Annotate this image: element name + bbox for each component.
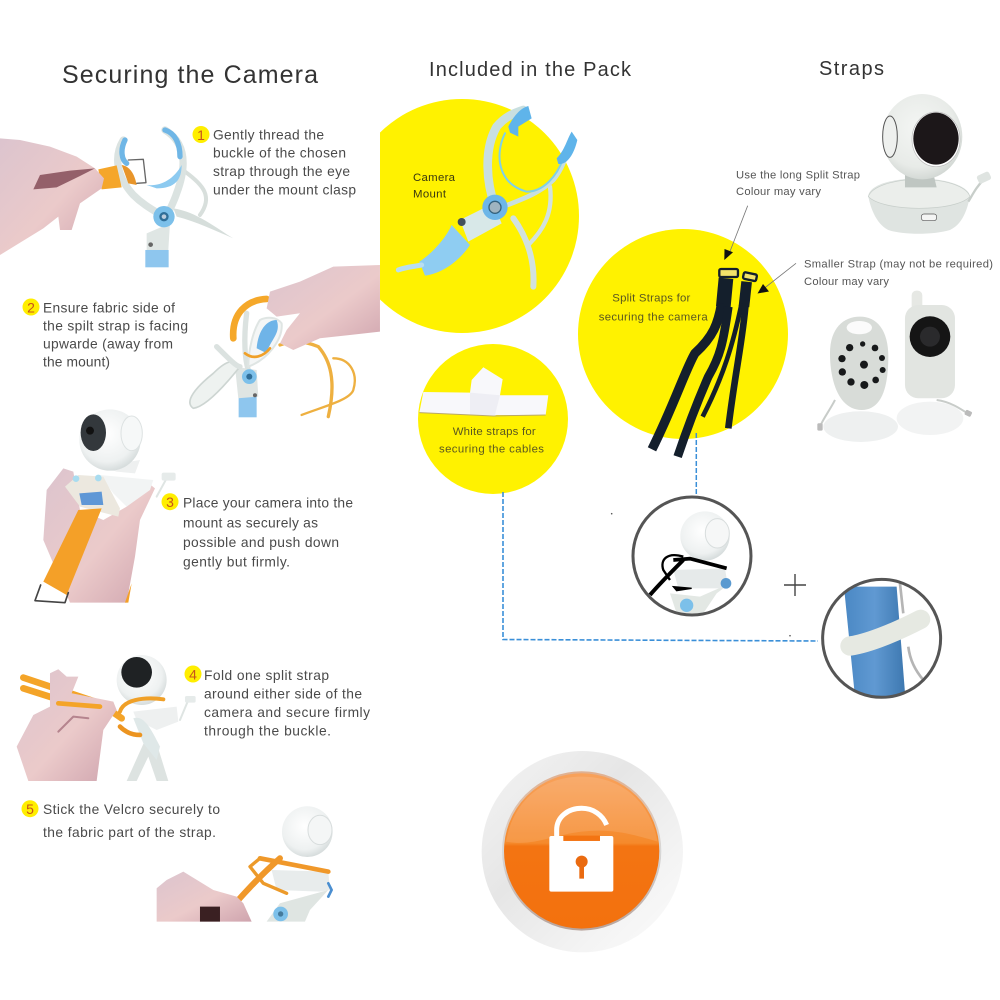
instruction text 3: possible and push down — [183, 535, 339, 550]
label: Camera Mount: Mount — [413, 188, 447, 200]
instruction text 2: the mount) — [43, 355, 110, 370]
badge 2 — [22, 298, 40, 316]
badge 3: 3 — [166, 494, 174, 510]
instruction text 2: upwarde (away from — [43, 336, 173, 351]
instruction text 1 — [213, 127, 356, 197]
padlock — [549, 808, 613, 892]
instruction text 1: buckle of the chosen — [213, 146, 346, 161]
instruction text 4: through the buckle. — [204, 723, 331, 738]
instruction text 3: gently but firmly. — [183, 555, 290, 570]
instruction text 1: strap through the eye — [213, 164, 350, 179]
instruction text 4: camera and secure firmly — [204, 705, 370, 720]
badge 4: 4 — [189, 666, 197, 682]
label: White straps for securing the cables: White straps for — [453, 426, 536, 438]
panel: white straps — [418, 344, 568, 494]
step 2 panel — [22, 265, 380, 417]
button halo — [482, 751, 683, 952]
callout: Smaller Strap — [804, 258, 993, 288]
photo: pan-tilt baby camera — [868, 94, 992, 234]
instruction text 3: mount as securely as — [183, 515, 318, 530]
heading: Straps: Straps — [819, 58, 884, 80]
callout: Smaller Strap: Colour may vary — [804, 276, 889, 288]
icon: camera mount — [398, 106, 577, 287]
label: Split Straps for securing the camera: securing the camera — [599, 312, 708, 324]
photo: hand threading strap through mount — [0, 130, 233, 267]
photo: baby monitor and camera unit — [817, 291, 972, 442]
instruction text 3 — [183, 496, 353, 570]
callout: Use the long Split Strap: Colour may vary — [736, 186, 821, 198]
photo: hand placing camera into mount — [35, 409, 176, 603]
icon: orange unlocked padlock button — [482, 751, 683, 952]
instruction text 1: under the mount clasp — [213, 182, 356, 197]
label: Split Straps for securing the camera — [599, 293, 708, 324]
callout: Use the long Split Strap — [736, 169, 860, 198]
instruction text 2: Ensure fabric side of — [43, 300, 175, 315]
decorative specks — [611, 513, 791, 636]
heading: Included in the Pack: Included in the Pack — [429, 59, 632, 81]
plus sign — [784, 574, 806, 596]
step 3 panel — [35, 409, 353, 603]
instruction text 2: the spilt strap is facing — [43, 319, 188, 334]
label: White straps for securing the cables: securing the cables — [439, 443, 544, 455]
yellow circle, split straps — [578, 229, 788, 439]
badge 2: 2 — [27, 300, 35, 316]
step 1 panel — [0, 126, 356, 267]
detail circle: white strap around stand — [823, 579, 941, 697]
photo: hand folding split strap around camera — [17, 655, 196, 781]
label: White straps for securing the cables — [439, 426, 544, 455]
label: Split Straps for securing the camera: Split Straps for — [612, 293, 691, 305]
instruction text 3: Place your camera into the — [183, 496, 353, 511]
badge 3 — [162, 493, 178, 510]
arrow to smaller strap — [758, 263, 796, 294]
step 5 panel — [22, 800, 333, 922]
instruction text 5 — [43, 802, 220, 840]
badge 5: 5 — [26, 801, 34, 817]
photo: hand holding strap on mount — [190, 265, 380, 417]
icon: white velcro strap — [419, 367, 548, 416]
instruction text 1: Gently thread the — [213, 127, 324, 142]
photo: sticking velcro on strap — [157, 806, 333, 922]
instruction text 4: around either side of the — [204, 687, 362, 702]
icon: black split straps — [652, 269, 757, 457]
callout: Use the long Split Strap: Use the long Split Strap — [736, 169, 860, 181]
instruction text 5: Stick the Velcro securely to — [43, 802, 220, 817]
yellow circle, mount — [380, 99, 579, 333]
dashed connector: white straps to stand — [503, 492, 818, 641]
label: Camera Mount — [413, 172, 456, 200]
instruction text 4 — [204, 668, 370, 738]
panel: split straps — [578, 229, 788, 457]
button face — [503, 772, 660, 930]
dashed connector: split straps to camera — [695, 433, 697, 497]
badge 5 — [22, 800, 38, 817]
instruction text 4: Fold one split strap — [204, 668, 329, 683]
title: Securing the Camera: Securing the Camera — [62, 61, 318, 89]
yellow circle, white straps — [418, 344, 568, 494]
step 4 panel — [17, 655, 370, 781]
detail circle: camera secured with strap — [633, 497, 751, 615]
badge 4 — [184, 666, 202, 682]
arrow to long strap — [724, 206, 748, 260]
badge 1 — [192, 126, 210, 143]
callout: Smaller Strap: Smaller Strap (may not be required) — [804, 258, 993, 270]
panel: camera mount — [380, 99, 579, 333]
badge 1: 1 — [197, 127, 205, 143]
label: Camera Mount: Camera — [413, 172, 456, 184]
instruction text 2 — [43, 300, 188, 370]
instruction text 5: the fabric part of the strap. — [43, 825, 216, 840]
